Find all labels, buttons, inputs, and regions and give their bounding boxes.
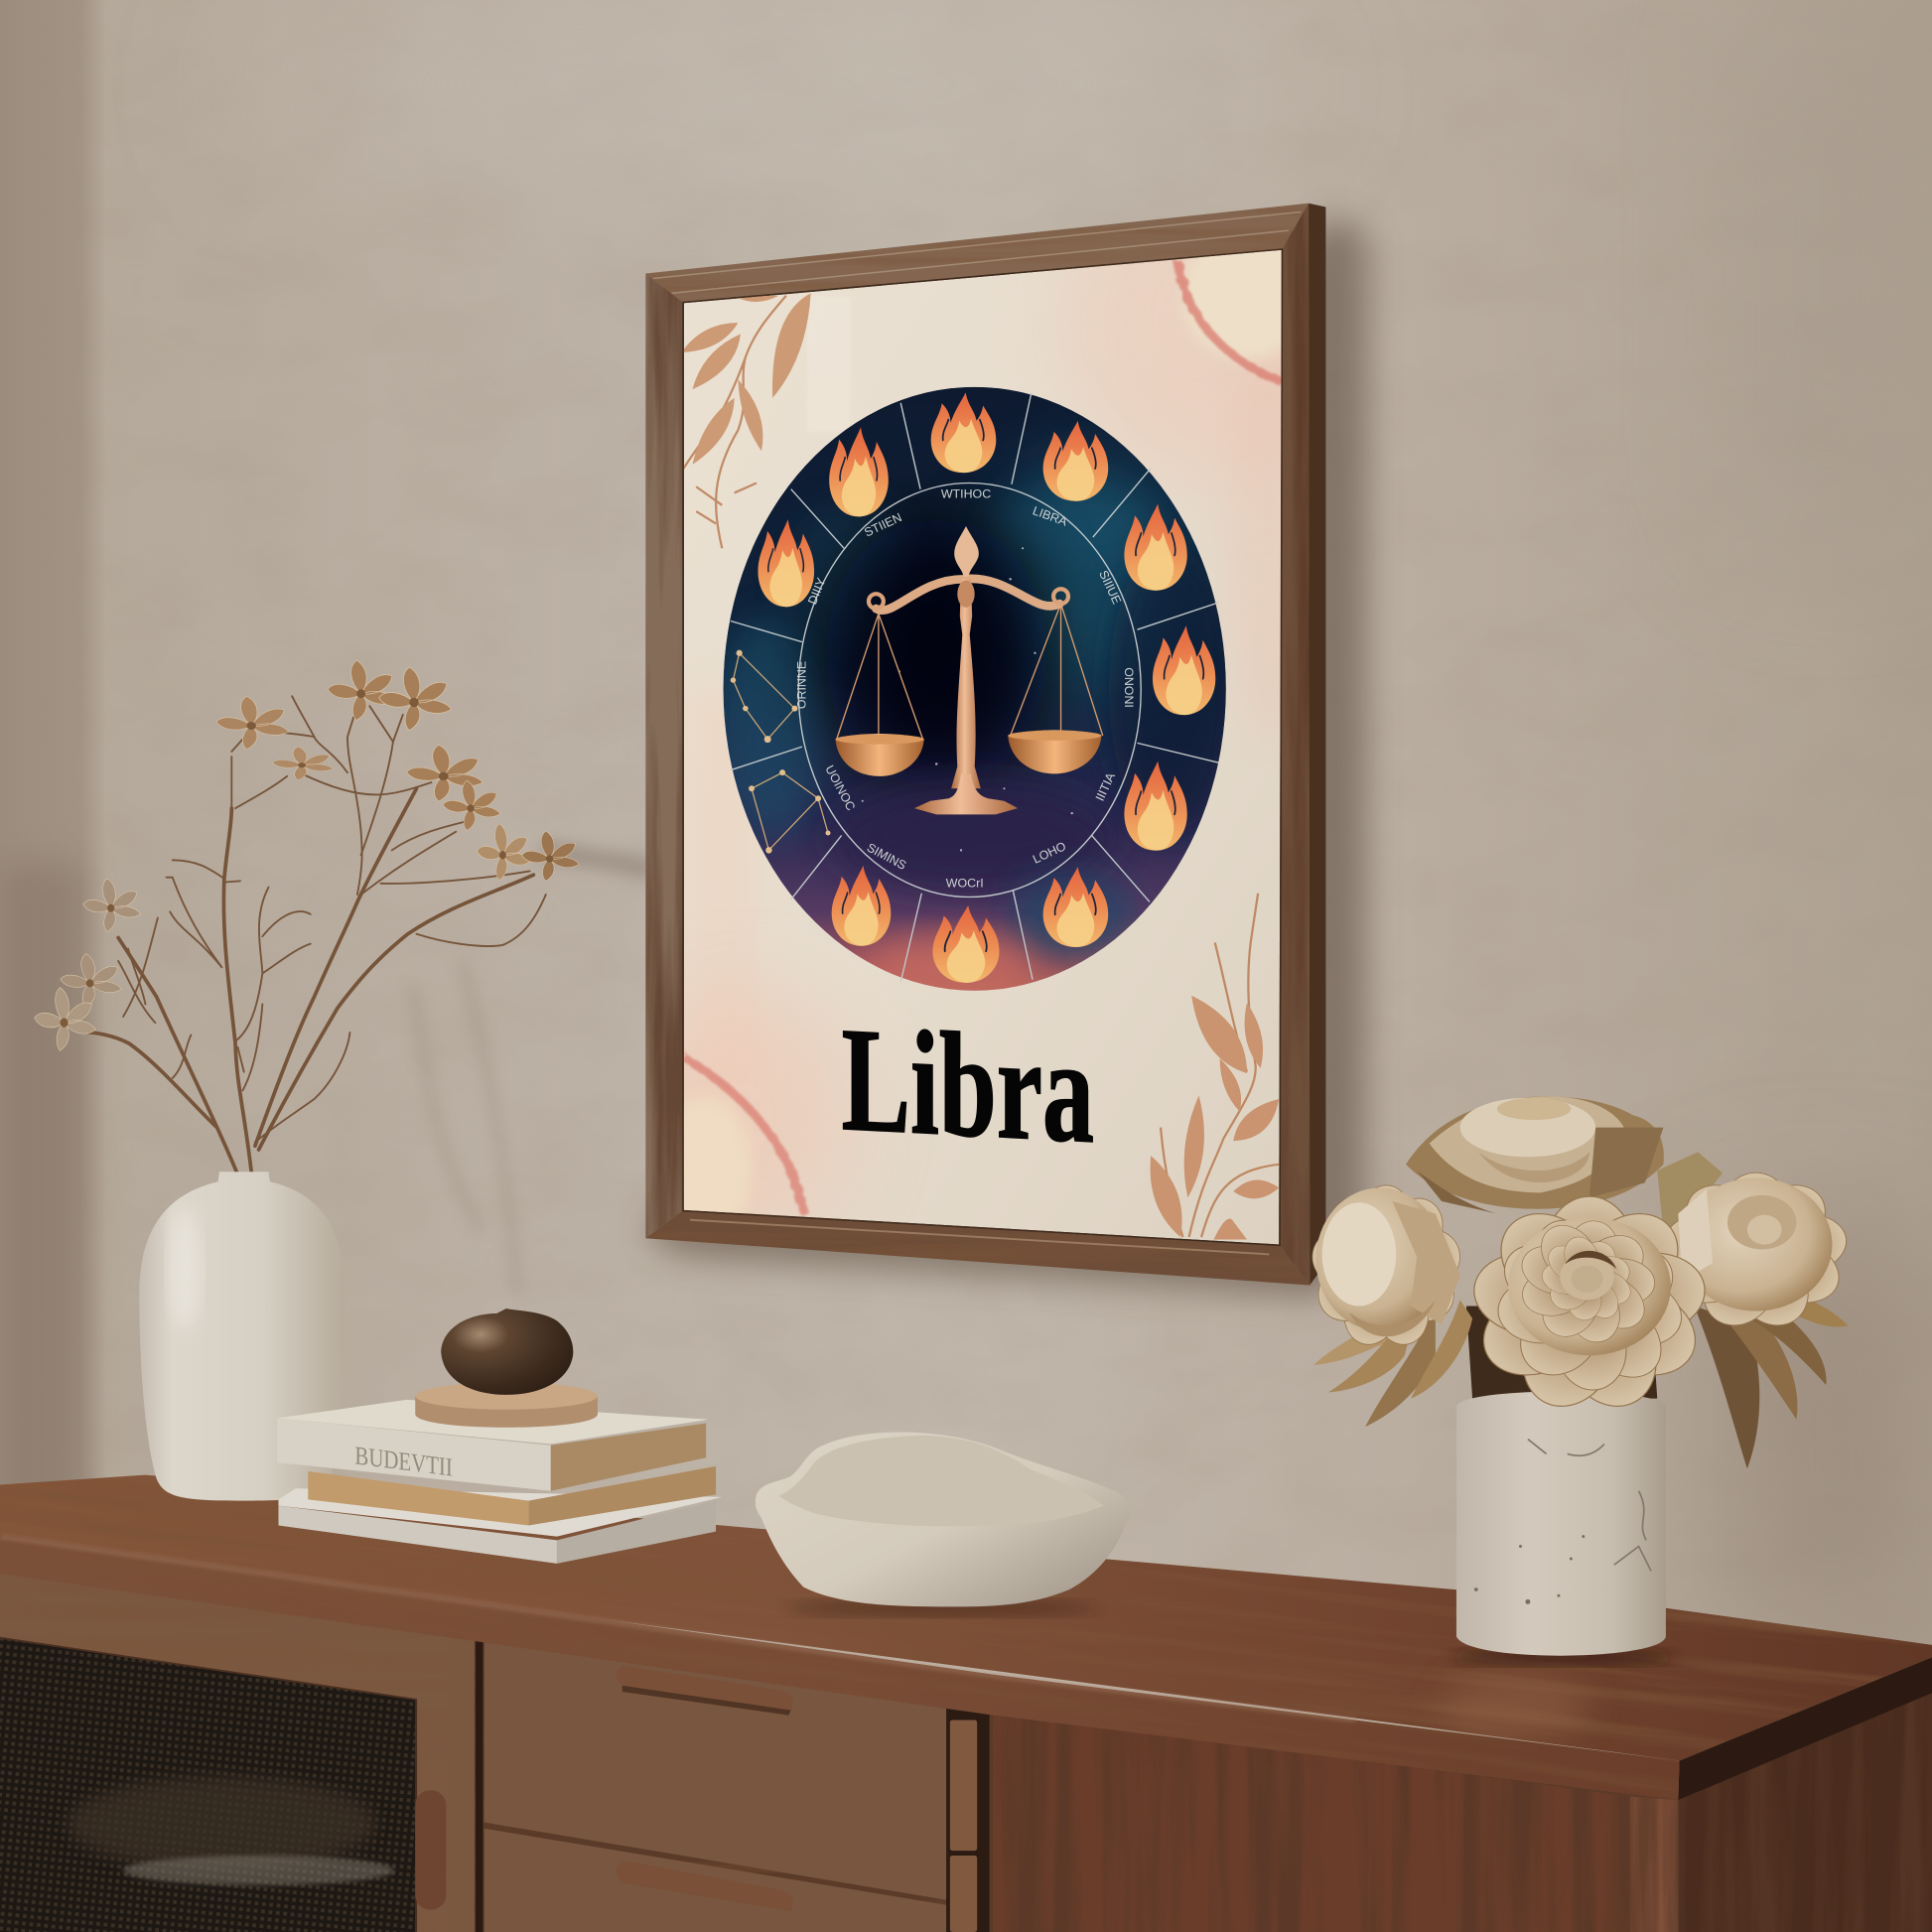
- peony: left: [1308, 1184, 1465, 1353]
- upper drawer: [484, 1640, 946, 1900]
- ring labels: WOCrI: [946, 877, 984, 891]
- wooden disc: [415, 1382, 598, 1428]
- dried flowers: [35, 660, 579, 1050]
- frame bottom rail: [645, 1210, 1310, 1285]
- libra scales icon: [835, 526, 1103, 814]
- bronze ornament on wooden disc: [415, 1309, 598, 1428]
- stone vase: [1456, 1391, 1666, 1656]
- ring labels: [795, 486, 1136, 891]
- ring labels: UOINOC: [822, 762, 858, 813]
- top surface: [0, 1257, 1932, 1847]
- flame icons: [758, 392, 1215, 983]
- poster art: [683, 250, 1282, 1245]
- right pan: [1008, 730, 1102, 773]
- beam: [876, 579, 1059, 611]
- bronze sphere: [441, 1309, 573, 1395]
- ring labels: WTIHOC: [941, 486, 991, 500]
- frame side edge: [1309, 204, 1325, 1285]
- bouquet and stone vase: [1308, 1096, 1853, 1666]
- feathered petals: left flower: [1313, 1300, 1472, 1427]
- stars: [862, 547, 1073, 851]
- right end of top: [1678, 1657, 1932, 1800]
- base: [914, 773, 1018, 814]
- vase shadow on table: [1451, 1649, 1673, 1666]
- sideboard front background: [0, 1565, 1678, 1932]
- left door: [0, 1565, 986, 1932]
- peony: top: [1406, 1096, 1664, 1213]
- ring labels: SIMINS: [865, 841, 908, 873]
- chains: [837, 604, 1103, 758]
- lower drawer handle: [617, 1861, 792, 1911]
- right door: [993, 1701, 1634, 1932]
- centre divider strip: [946, 1706, 990, 1932]
- branch shadows on wall: [413, 850, 653, 1294]
- botanical sprig: top left: [681, 293, 811, 548]
- ring labels: SIIIUE: [1096, 568, 1124, 607]
- bottom book: [278, 1488, 722, 1564]
- bowl interior: [778, 1436, 1104, 1526]
- zodiac wheel: [715, 387, 1232, 1000]
- peony: centre rose: [1465, 1188, 1713, 1424]
- watercolor wash: bottom left: [683, 715, 846, 1219]
- middle book: [308, 1466, 716, 1525]
- upper drawer handle: [617, 1666, 792, 1711]
- dried branches: [78, 696, 546, 1172]
- constellations: [731, 650, 830, 854]
- ring labels: STIIEN: [862, 510, 903, 540]
- frame right rail: [1279, 204, 1310, 1285]
- dark stems behind flowers: [1466, 1307, 1657, 1399]
- ring labels: IIITIA: [1093, 770, 1118, 803]
- top book: [277, 1400, 709, 1491]
- ring labels: LIBRA: [1031, 503, 1069, 529]
- feathered petals: right flower: [1694, 1294, 1849, 1468]
- watercolor wash: top right: [1054, 250, 1282, 704]
- ring labels: ONONI: [1122, 667, 1136, 708]
- frame top rail: [645, 204, 1309, 303]
- ceramic bowl: [756, 1433, 1130, 1616]
- front lip: [0, 1364, 1932, 1890]
- ring labels: DIIIY: [805, 576, 829, 607]
- finial: [954, 526, 979, 577]
- book cover title: BUDEVTII: [354, 1442, 453, 1482]
- peony: right: [1659, 1172, 1853, 1334]
- lower drawer: [484, 1829, 946, 1932]
- ring labels: LOHO: [1031, 839, 1068, 867]
- door handle: [415, 1790, 446, 1910]
- frame shadow on wall: [645, 215, 1368, 1297]
- poster frame: [645, 204, 1325, 1288]
- side panel: [1630, 1688, 1932, 1932]
- olive leaves: [1657, 1152, 1723, 1232]
- door mesh panel: [0, 1626, 419, 1932]
- wheel disc with nebula: [715, 387, 1232, 1000]
- left pan: [835, 734, 924, 776]
- stack of books: [277, 1400, 722, 1564]
- sideboard: [0, 1257, 1932, 1932]
- title: Libra: [842, 996, 1094, 1173]
- vase body: [139, 1172, 345, 1501]
- botanical sprig: bottom right: [1151, 894, 1279, 1240]
- frame left rail: [645, 274, 684, 1238]
- central column: [951, 579, 981, 788]
- left vase with dried branches: [35, 660, 579, 1501]
- glass reflection: [807, 296, 850, 431]
- ring labels: ORINNE: [795, 661, 809, 709]
- wheel dividers and inner ring: [731, 393, 1218, 982]
